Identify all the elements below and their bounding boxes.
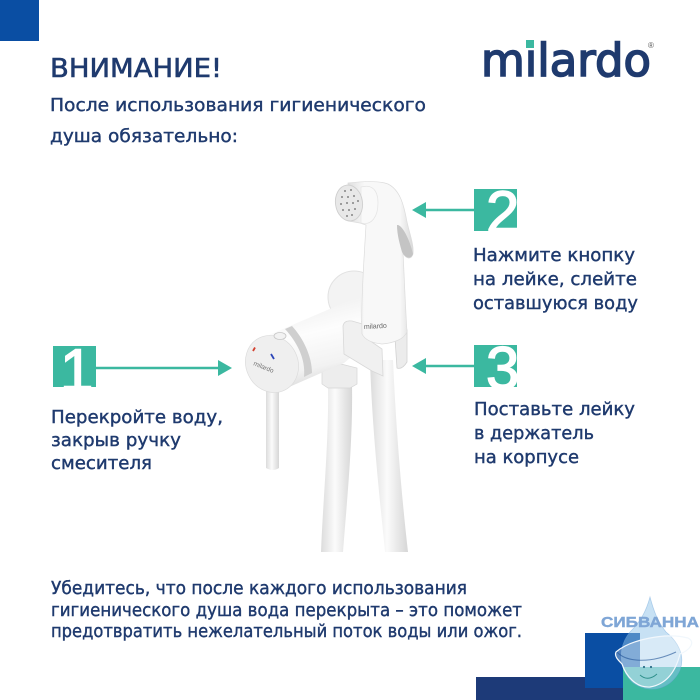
hose nut: [322, 364, 357, 388]
lever handle: [266, 384, 279, 470]
intro text: [50, 95, 426, 147]
callout 3: на корпусе: [474, 448, 579, 468]
callout 3: [412, 335, 635, 468]
wall disc: [328, 271, 380, 323]
callout 1: 1: [60, 337, 93, 404]
holder clip: [395, 330, 407, 368]
callout 2: на лейке, слейте: [473, 270, 637, 290]
knob face: [236, 327, 308, 401]
tub eyes: [643, 666, 652, 668]
bathtub: [615, 636, 692, 687]
spray nozzles: [340, 189, 359, 217]
knob brand: milardo: [252, 360, 275, 375]
watermark: Sibvanna: [601, 597, 700, 689]
cold mark: [271, 354, 274, 359]
logo: milardo: milardo: [481, 34, 651, 87]
callout 3: Поставьте лейку: [474, 400, 635, 420]
faucet illustration: [236, 182, 413, 552]
callout 1: Перекройте воду,: [51, 408, 223, 428]
band on cylinder: [285, 326, 312, 377]
handset collar: [361, 186, 378, 224]
callout 3: 3: [486, 335, 519, 402]
tub smile: [640, 674, 657, 678]
corner square: [0, 0, 39, 41]
logo: milardo: ®: [648, 41, 654, 50]
right hose: [370, 360, 408, 552]
mixer body: [262, 296, 362, 391]
callout 1: закрыв ручку: [51, 431, 181, 451]
knob button: [274, 332, 286, 340]
tub rim shadow: [617, 652, 676, 660]
callout 2: Нажмите кнопку: [473, 246, 635, 266]
watermark text: СИБВАННА: [601, 615, 700, 631]
callout 2: [412, 179, 638, 314]
left hose: [321, 385, 352, 552]
intro text: После использования гигиенического: [50, 95, 426, 116]
callout 1: смесителя: [51, 454, 152, 474]
callout 2: оставшуюся воду: [473, 294, 638, 314]
spray face: [333, 183, 365, 223]
closing note: Убедитесь, что после каждого использования: [51, 579, 467, 599]
intro text: душа обязательно:: [50, 126, 238, 147]
closing note: гигиенического душа вода перекрыта – это поможет: [51, 601, 522, 621]
corner blocks: [476, 633, 700, 700]
handset trigger: [397, 225, 413, 258]
closing note: предотвратить нежелательный поток воды или ожог.: [51, 622, 522, 642]
callout 3: в держатель: [474, 424, 594, 444]
drop: [621, 597, 682, 689]
hot mark: [253, 348, 255, 351]
callout 2: 2: [486, 179, 519, 246]
holder: [343, 321, 383, 376]
handset brand: milardo: [364, 323, 387, 331]
handset: [348, 182, 413, 344]
closing note: [51, 579, 522, 642]
title: ВНИМАНИЕ!: [50, 54, 222, 84]
callout 1: [51, 337, 232, 474]
